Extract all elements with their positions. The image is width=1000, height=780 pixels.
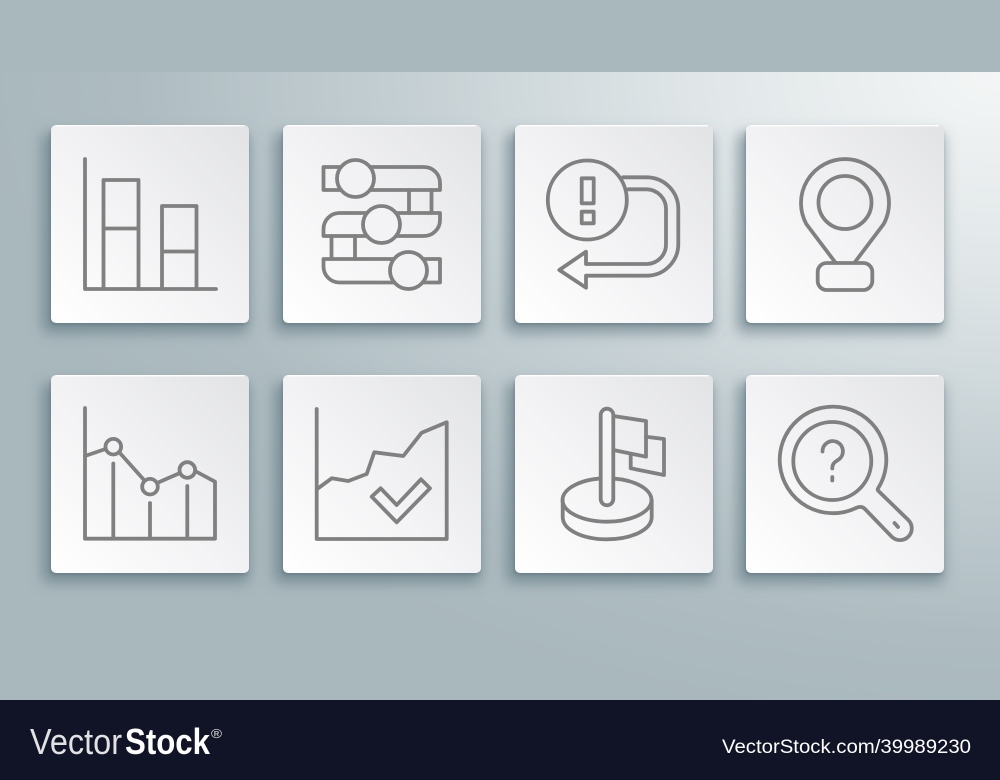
panel: return alert: [506, 125, 713, 333]
panel: line and bar chart: [42, 375, 249, 583]
panel: stacked bar chart: [42, 125, 249, 333]
footer logo: Stock: [125, 721, 211, 762]
panel: map pin: [737, 125, 944, 333]
icon: sliders: [324, 160, 440, 289]
icon: magnifier with question mark: [780, 407, 912, 540]
icon: area chart with check mark: [317, 409, 447, 539]
footer logo: [30, 721, 222, 762]
footer bar: [0, 700, 1000, 780]
icon: map pin: [801, 159, 889, 290]
panel: area chart with check: [274, 375, 481, 583]
footer logo: ®: [211, 726, 222, 741]
icon: alert with return arrow: [548, 160, 678, 288]
icon: flag on round base: [562, 409, 664, 539]
panel: sliders: [274, 125, 481, 333]
icon: falling line chart: [85, 408, 215, 539]
panel: magnifier with question: [737, 375, 944, 583]
footer logo: Vector: [30, 721, 122, 762]
footer image id: VectorStock.com/39989230: [722, 737, 971, 758]
icon: stacked bar chart: [85, 159, 216, 289]
panel: flag on base: [506, 375, 713, 583]
